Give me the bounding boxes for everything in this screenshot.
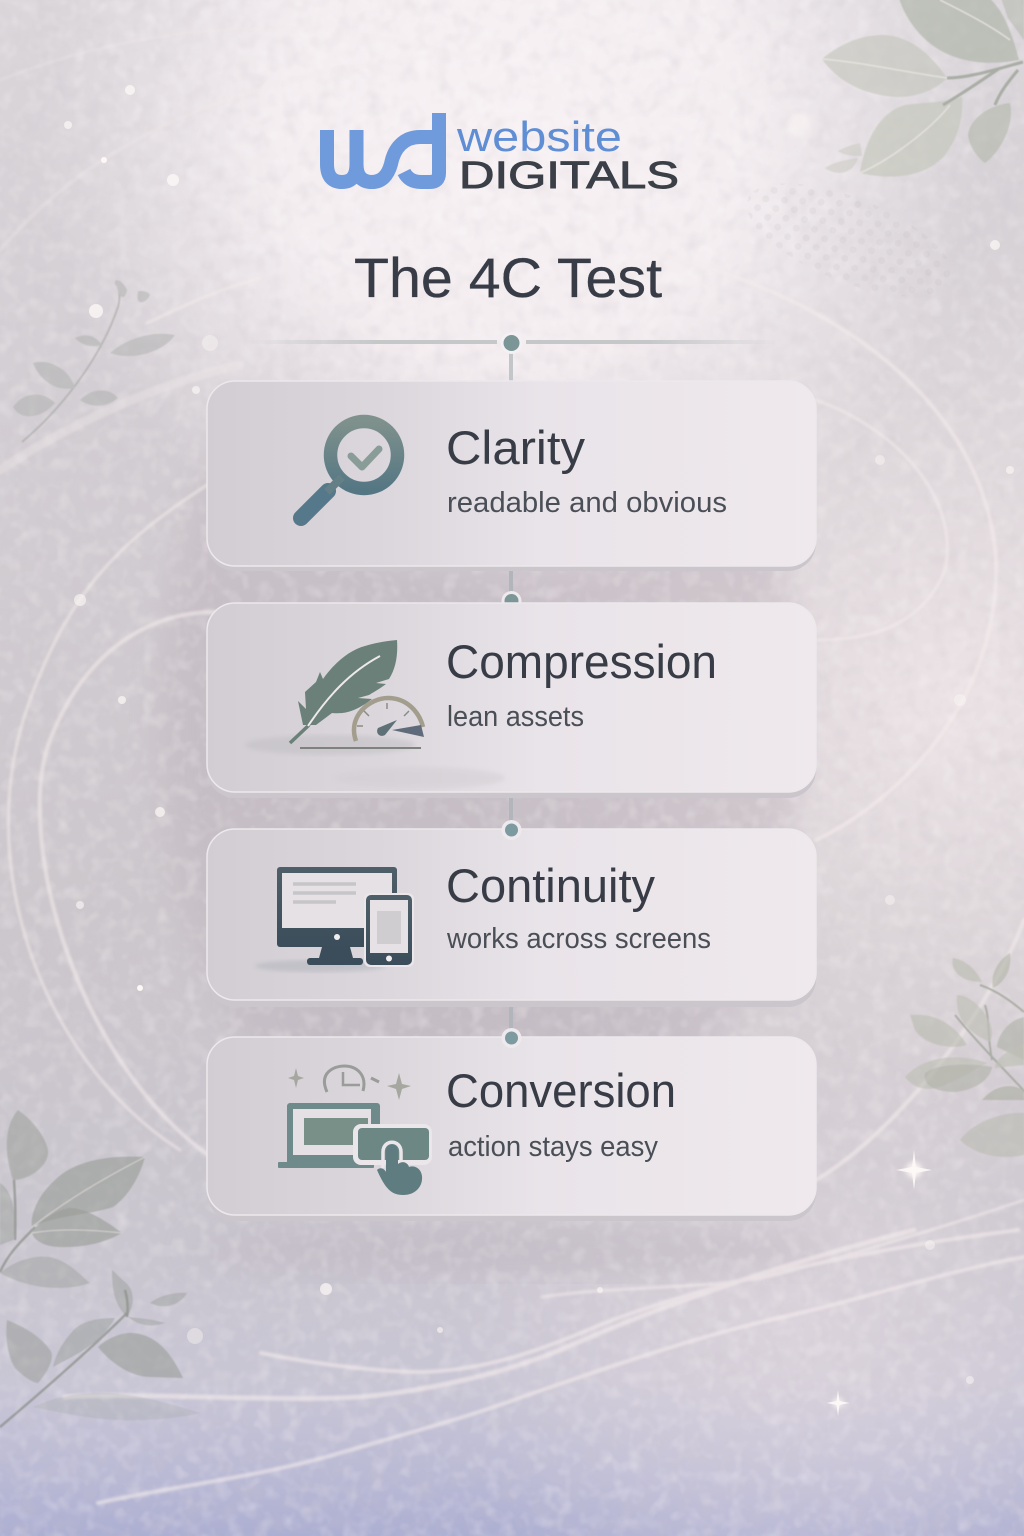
heading: conversion: Conversion	[446, 1064, 676, 1117]
decorative leaves: top right	[822, 0, 1024, 177]
connector lines between cards	[502, 570, 522, 1038]
panel: continuity	[207, 829, 816, 1007]
text: compression description: lean assets	[447, 701, 584, 733]
text: continuity description: works across screens	[446, 923, 711, 955]
icon: desktop monitor and tablet	[255, 867, 414, 972]
text: conversion description: action stays easy	[448, 1131, 658, 1163]
logo mark: wd	[327, 113, 439, 182]
connector nodes	[502, 820, 522, 1048]
logo word: website: website	[456, 113, 622, 160]
decorative leaves: lower right	[905, 953, 1024, 1157]
icon: magnifying glass with check	[301, 422, 398, 518]
logo word: DIGITALS: DIGITALS	[459, 155, 679, 197]
panel: conversion	[207, 1037, 816, 1221]
heading: clarity: Clarity	[446, 421, 586, 474]
panel: compression	[207, 603, 816, 798]
icon: feather and speedometer	[245, 640, 505, 789]
decorative leaves: lower left	[0, 1110, 200, 1427]
top connector	[250, 332, 776, 382]
heading: compression: Compression	[446, 635, 717, 688]
decorative leaves: upper left	[13, 280, 175, 442]
icon: laptop, button, hand and gauge	[278, 1066, 432, 1195]
logo	[327, 113, 679, 197]
heading: continuity: Continuity	[446, 859, 655, 912]
title: The 4C Test	[354, 246, 662, 309]
panel: clarity	[207, 381, 816, 571]
text: clarity description: readable and obvious	[447, 487, 727, 519]
